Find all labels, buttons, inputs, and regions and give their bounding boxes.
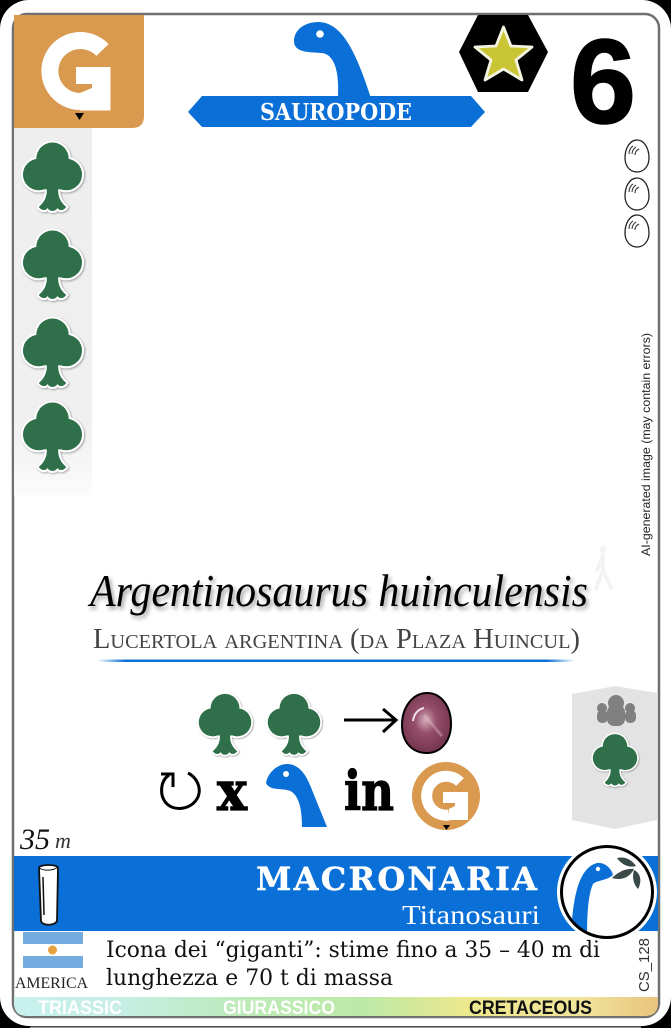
icon: clade badge: [557, 842, 657, 942]
size label: 35: [19, 823, 50, 856]
icon: flag of Argentina: [23, 932, 83, 968]
icon: tree: [593, 734, 637, 786]
icon: tree 3: [23, 319, 82, 387]
icon: sauropod head small: [266, 764, 327, 827]
size label: [19, 823, 71, 856]
panel: rule line 2: [161, 759, 480, 830]
disclaimer: AI-generated image (may contain errors): [639, 333, 653, 556]
common name: Lucertola argentina (da Plaza Huincul): [93, 624, 580, 655]
icon: arrow: [344, 709, 396, 732]
icon: egg 2: [625, 178, 649, 210]
banner: sauropode: SAUROPODE: [260, 99, 412, 126]
description: lunghezza e 70 t di massa: [106, 966, 393, 991]
value number: 6: [570, 15, 636, 149]
description: [106, 938, 600, 991]
panel: habitat sidebar: [14, 128, 92, 495]
icon: sauropod head: [294, 22, 371, 98]
icon: egg 1: [625, 140, 649, 172]
clade title: MACRONARIA: [256, 860, 538, 898]
text: x: x: [217, 759, 248, 823]
scientific name: Argentinosaurus huinculensis: [87, 565, 588, 616]
size label: m: [55, 828, 71, 853]
icon: tree cost 2: [268, 694, 320, 755]
era: triassic: TRIASSIC: [38, 998, 122, 1019]
icon: egg 3: [625, 215, 649, 247]
icon: repeat arrow: [161, 773, 199, 808]
icon: tree cost 1: [199, 694, 251, 755]
icon: tree 1: [23, 143, 82, 211]
icon: bone cylinder: [39, 865, 58, 925]
icon: period G coin: [412, 762, 480, 830]
card code: CS_128: [636, 938, 653, 992]
icon: sauropod eye: [316, 30, 324, 38]
text: in: in: [344, 759, 394, 823]
continent label: AMERICA: [15, 975, 88, 992]
panel: period badge G: [14, 15, 144, 128]
icon: star hexagon: [459, 15, 548, 92]
eggs: [625, 140, 649, 247]
era: cretaceous: CRETACEOUS: [469, 998, 592, 1019]
icon: tree 2: [23, 231, 82, 299]
icon: people group: [597, 695, 636, 726]
icon: human scale silhouette: [596, 546, 611, 589]
panel: rule line 1: [199, 693, 451, 755]
era: jurassic: GIURASSICO: [223, 998, 335, 1019]
icon: tree 4: [23, 403, 82, 471]
era timeline: [14, 997, 658, 1019]
banner: sauropode: [188, 96, 485, 127]
panel: clade band: [14, 842, 658, 942]
icon: red egg: [402, 693, 451, 753]
rule under name: [97, 660, 575, 662]
description: Icona dei “giganti”: stime fino a 35 – 40 m di: [106, 938, 600, 963]
clade subtitle: Titanosauri: [402, 900, 540, 930]
panel: habitat tag: [572, 686, 657, 829]
